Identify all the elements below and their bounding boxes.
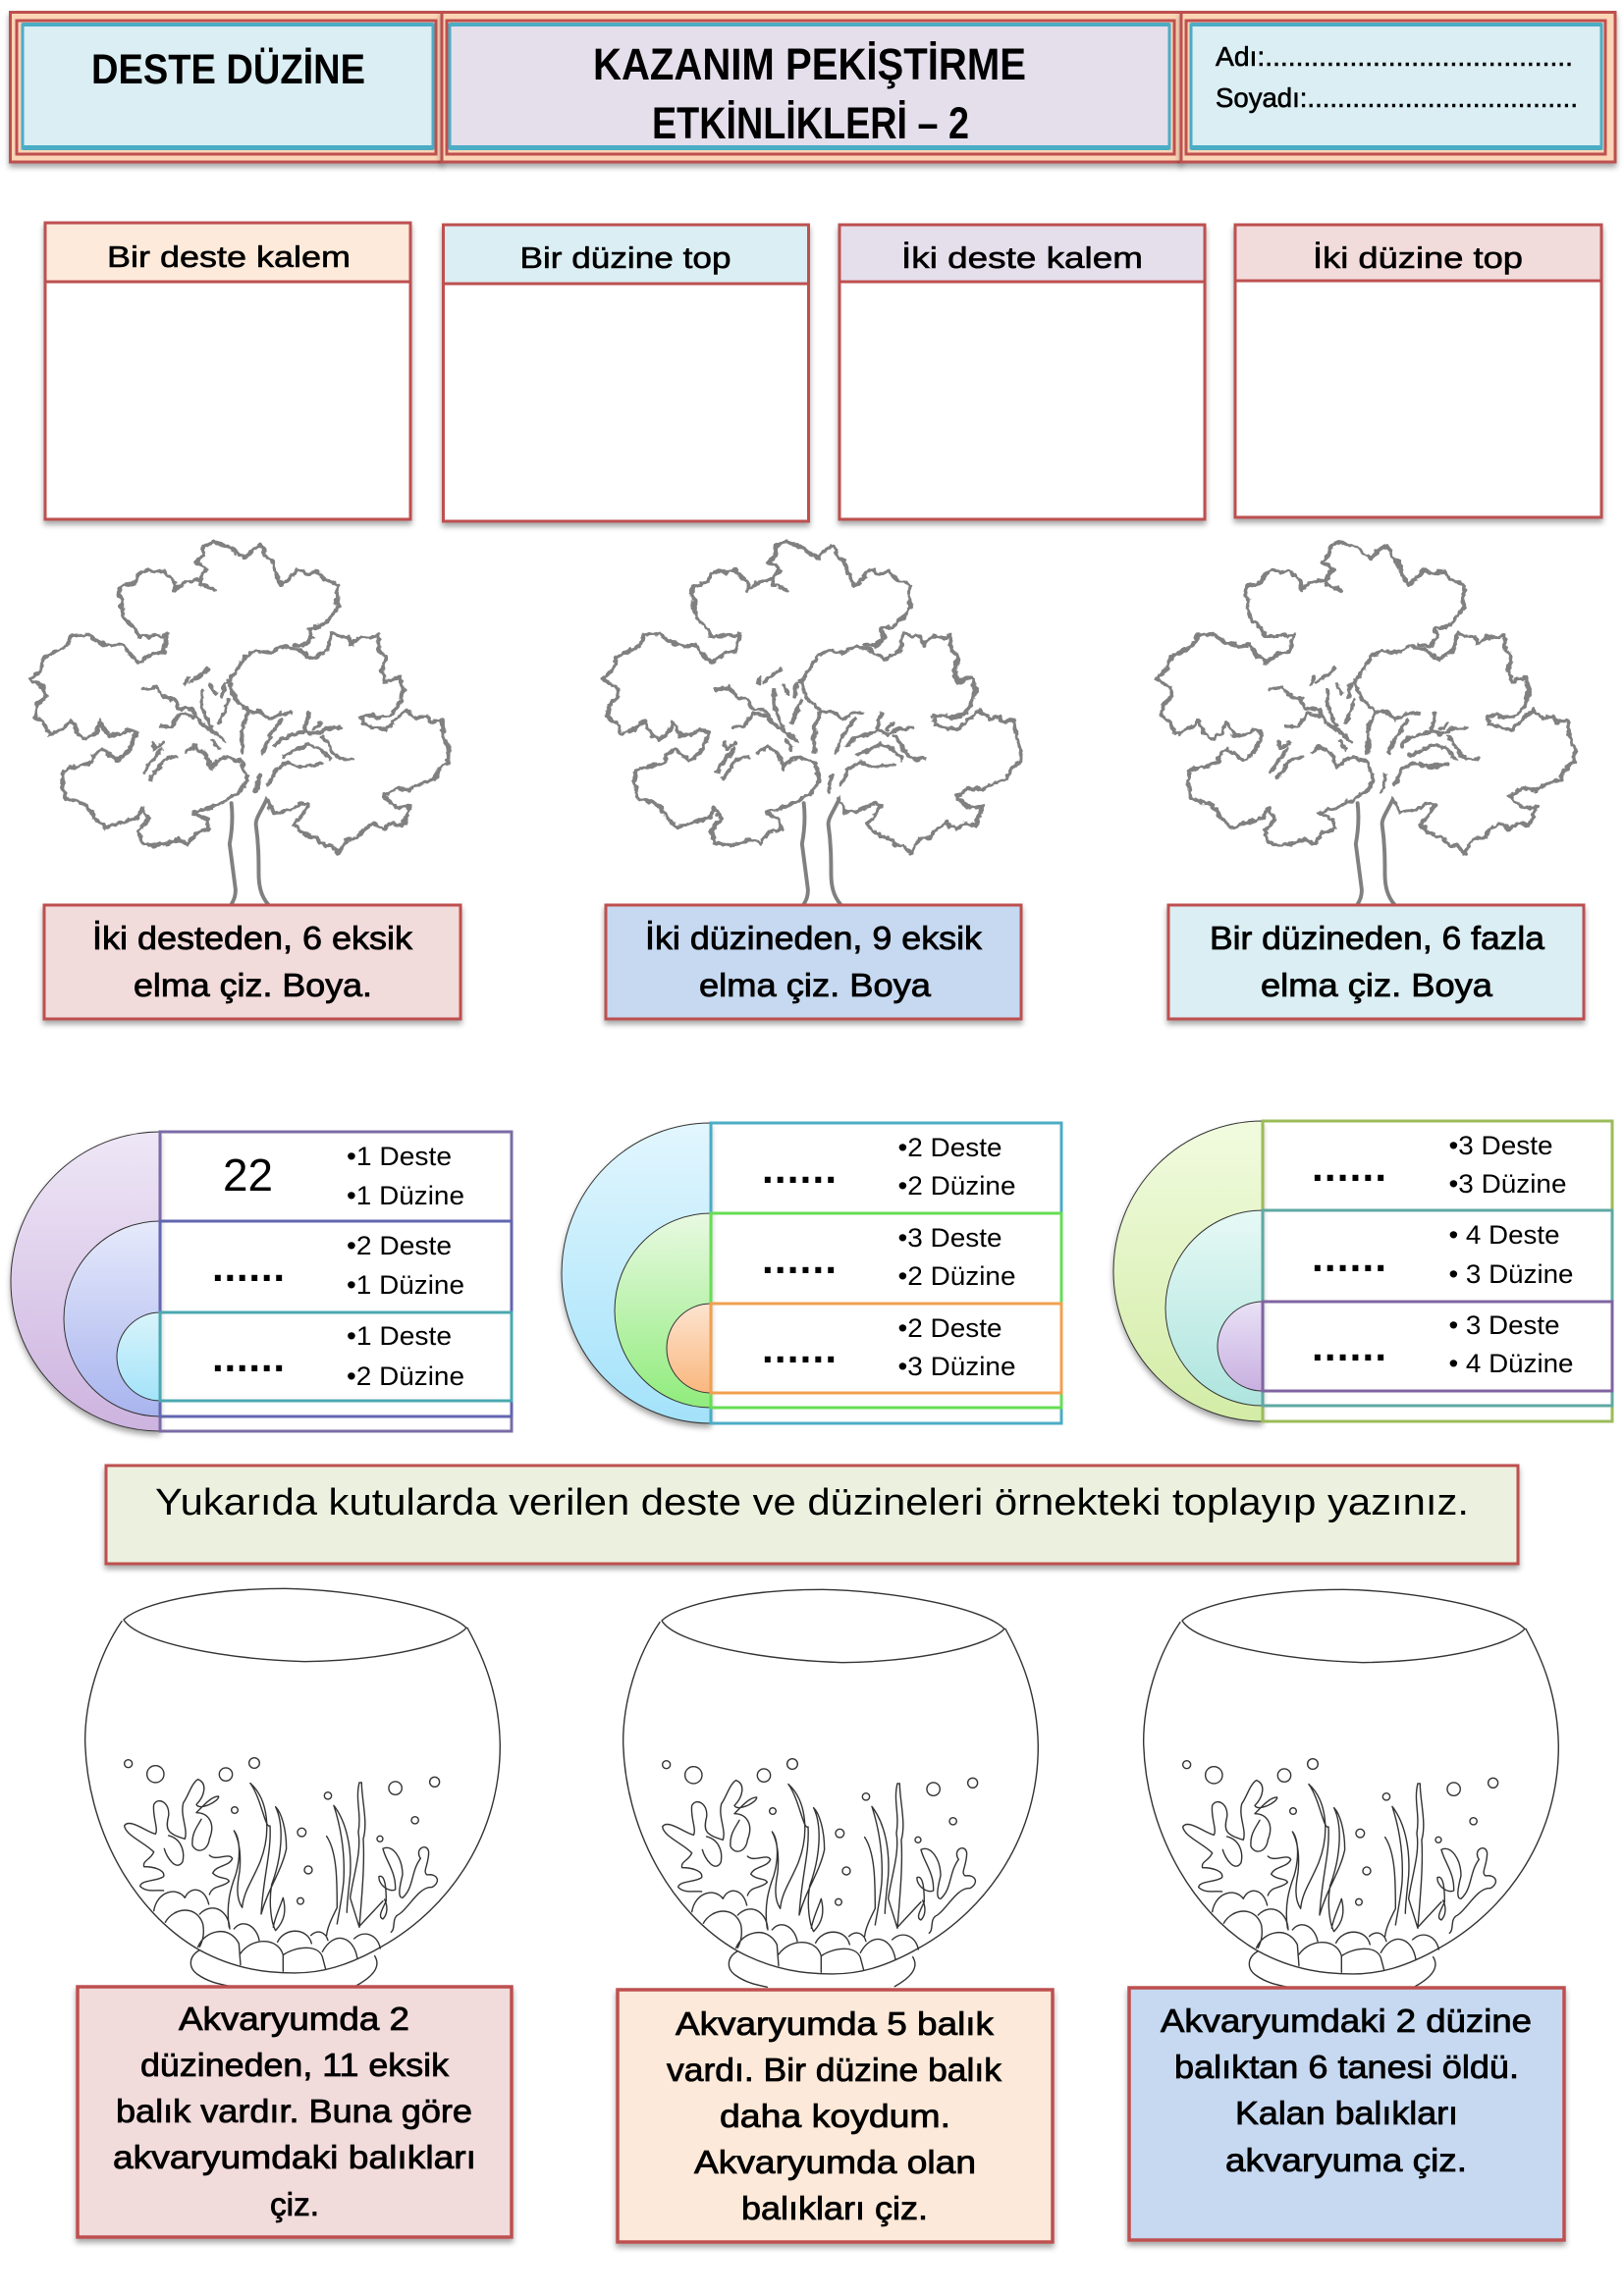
illustration: tree 3	[1156, 542, 1575, 904]
task box: tree 2	[606, 905, 1021, 1019]
text: elma çiz. Boya.	[134, 967, 372, 1003]
text: çiz.	[270, 2186, 319, 2222]
text: daha koydum.	[720, 2098, 950, 2134]
panel: name fields	[1181, 12, 1615, 162]
dots: ......	[762, 1146, 837, 1192]
panel: iki deste kalem	[839, 225, 1205, 519]
label: iki duzine top: İki düzine top	[1313, 240, 1523, 275]
list item: • 4 Deste	[1449, 1220, 1559, 1250]
heading: title line 1: KAZANIM PEKİŞTİRME	[593, 39, 1026, 89]
panel: iki duzine top	[1235, 225, 1601, 517]
list item: •3 Deste	[1449, 1131, 1553, 1160]
label: bir deste kalem: Bir deste kalem	[107, 240, 351, 274]
panel: topic	[10, 12, 442, 162]
illustration: tree 1	[29, 542, 449, 904]
text: surname line: Soyadı:....................................	[1216, 82, 1578, 113]
list item: •2 Deste	[897, 1133, 1001, 1162]
text: Akvaryumda olan	[694, 2144, 976, 2180]
label: bir duzine top: Bir düzine top	[520, 240, 731, 275]
heading: title line 2: ETKİNLİKLERİ – 2	[652, 98, 969, 148]
text: Akvaryumda 5 balık	[676, 2005, 995, 2042]
heading: topic: DESTE DÜZİNE	[91, 46, 365, 93]
dots: ......	[1312, 1144, 1386, 1190]
text: vardı. Bir düzine balık	[667, 2052, 1002, 2088]
list item: •2 Deste	[897, 1313, 1001, 1343]
list item: • 3 Deste	[1449, 1310, 1559, 1340]
text: İki desteden, 6 eksik	[92, 920, 413, 956]
task box: tree 1	[44, 905, 460, 1019]
text: akvaryumdaki balıkları	[113, 2139, 476, 2175]
panel: bir deste kalem	[45, 223, 410, 519]
text: Bir düzineden, 6 fazla	[1210, 920, 1545, 956]
illustration: fish bowl 2	[623, 1589, 1038, 1987]
list item: •2 Düzine	[897, 1171, 1015, 1201]
panel: title	[442, 12, 1181, 162]
dots: ......	[1312, 1234, 1386, 1280]
header band	[10, 12, 1615, 162]
task box: bowl 2	[618, 1990, 1053, 2242]
list item: •1 Deste	[347, 1321, 452, 1351]
text: Akvaryumda 2	[179, 2001, 409, 2037]
list item: •2 Düzine	[347, 1362, 464, 1391]
dots: ......	[762, 1325, 837, 1371]
text: balıktan 6 tanesi öldü.	[1174, 2049, 1519, 2085]
list item: •3 Deste	[897, 1223, 1001, 1253]
text: akvaryuma çiz.	[1225, 2142, 1467, 2178]
text: balıkları çiz.	[741, 2190, 928, 2226]
text: elma çiz. Boya	[1261, 967, 1493, 1003]
panel: bir duzine top	[444, 225, 809, 521]
diagram: group 2	[562, 1123, 1061, 1423]
task box: bowl 1	[78, 1987, 512, 2237]
list item: •1 Düzine	[347, 1270, 464, 1300]
list item: • 4 Düzine	[1449, 1349, 1573, 1378]
list item: •3 Düzine	[897, 1352, 1015, 1381]
list item: • 3 Düzine	[1449, 1259, 1573, 1289]
diagram: group 1	[11, 1132, 512, 1431]
dots: ......	[212, 1244, 285, 1290]
text: İki düzineden, 9 eksik	[645, 920, 983, 956]
task box: bowl 3	[1129, 1988, 1564, 2240]
dots: ......	[1312, 1323, 1386, 1369]
task box: tree 3	[1168, 905, 1584, 1019]
instruction banner	[106, 1466, 1518, 1564]
text: Akvaryumdaki 2 düzine	[1161, 2002, 1532, 2039]
text: name line: Adı:........................................	[1216, 41, 1573, 72]
list item: •1 Deste	[347, 1142, 452, 1171]
illustration: fish bowl 1	[85, 1588, 500, 1986]
illustration: fish bowl 3	[1144, 1589, 1558, 1987]
label: iki deste kalem: İki deste kalem	[901, 240, 1143, 275]
text: elma çiz. Boya	[699, 967, 932, 1003]
text: Yukarıda kutularda verilen deste ve düzineleri örnekteki toplayıp yazınız.	[155, 1482, 1469, 1523]
text: Kalan balıkları	[1235, 2095, 1458, 2131]
text: balık vardır. Buna göre	[116, 2093, 472, 2129]
text: düzineden, 11 eksik	[140, 2047, 450, 2083]
list item: •2 Düzine	[897, 1261, 1015, 1291]
list item: •3 Düzine	[1449, 1169, 1567, 1199]
list item: •1 Düzine	[347, 1181, 464, 1210]
value: 22: 22	[223, 1149, 273, 1201]
diagram: group 3	[1113, 1121, 1612, 1421]
illustration: tree 2	[602, 542, 1021, 904]
dots: ......	[212, 1334, 285, 1380]
list item: •2 Deste	[347, 1231, 452, 1260]
dots: ......	[762, 1236, 837, 1282]
